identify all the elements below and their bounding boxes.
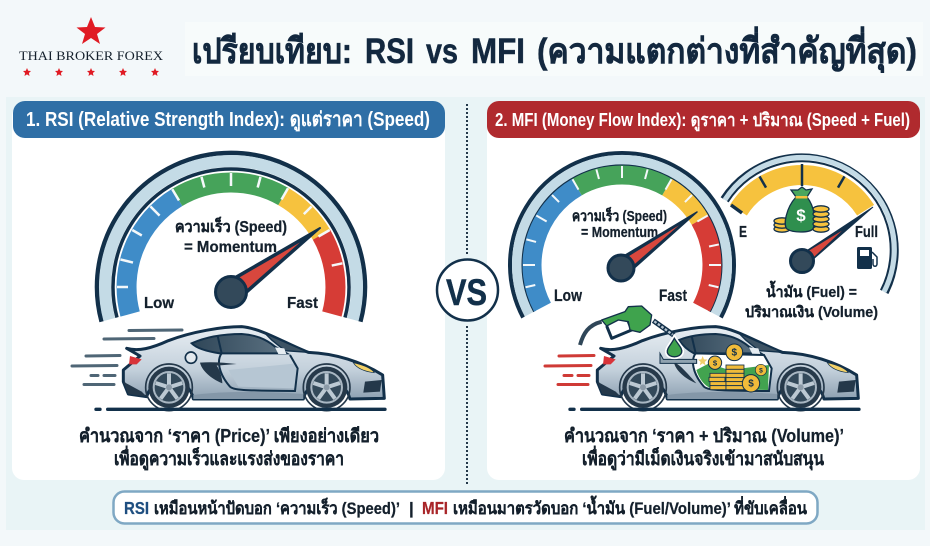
- logo wordmark: THAI BROKER FOREX: [19, 48, 164, 63]
- fuel caption: ปริมาณเงิน (Volume): [745, 303, 878, 321]
- bottom callout: RSI: [124, 498, 149, 518]
- money window in car door: $: [713, 358, 718, 367]
- gauge label: speed = momentum: [175, 215, 287, 256]
- speed lines: MFI car: [545, 356, 594, 384]
- caption: RSI: คำนวณจาก ‘ราคา (Price)’ เพียงอย่างเดียว: [79, 425, 379, 446]
- car: MFI: [570, 327, 859, 411]
- gauge label: Fast: Fast: [659, 287, 687, 305]
- panel: MFI: [487, 101, 920, 480]
- rear wheel: [146, 364, 192, 411]
- fuel caption: น้ำมัน (Fuel) =: [766, 280, 857, 301]
- fuel label: Full: Full: [855, 224, 878, 241]
- speed gauge: MFI: [510, 153, 734, 318]
- road line: [96, 404, 385, 414]
- title: [192, 26, 917, 73]
- VS badge: VS: [446, 272, 487, 313]
- title: vs: [426, 32, 458, 71]
- bottom callout: MFI: [422, 498, 448, 518]
- fuel caption: [745, 280, 878, 321]
- gauge needle: MFI: [608, 212, 697, 281]
- gauge needle: RSI: [216, 228, 320, 308]
- icon: large red star: [76, 17, 106, 44]
- speed lines: RSI car: [72, 330, 182, 384]
- fuel needle: [790, 207, 873, 272]
- icon: money bag and coins: [774, 187, 829, 232]
- car: RSI: [96, 327, 385, 411]
- title: MFI: [471, 32, 525, 71]
- bottom callout: [114, 492, 818, 524]
- bottom callout: เหมือนหน้าปัดบอก ‘ความเร็ว (Speed)’: [154, 496, 400, 518]
- fuel label: E: E: [739, 224, 747, 241]
- caption: MFI: [564, 425, 844, 471]
- gauge label: speed = momentum: = Momentum: [184, 239, 277, 256]
- panel heading: RSI: [13, 101, 445, 138]
- panel background: [12, 104, 445, 480]
- money window in car door: [693, 344, 772, 392]
- logo: Thai Broker Forex: [19, 17, 164, 76]
- bottom callout: |: [409, 499, 414, 518]
- gauge label: Fast: Fast: [287, 295, 319, 312]
- panel: RSI: [12, 101, 445, 480]
- gauge label: speed = momentum: = Momentum: [581, 225, 658, 241]
- speed gauge: RSI: [97, 153, 365, 322]
- caption: MFI: เพื่อดูว่ามีเม็ดเงินจริงเข้ามาสนับสนุน: [582, 445, 824, 471]
- panel background: [487, 104, 920, 480]
- gauge label: speed = momentum: [572, 206, 667, 241]
- money window in car door: $: [759, 367, 763, 374]
- gauge label: Low: Low: [144, 295, 175, 312]
- panel heading: MFI: [487, 101, 920, 138]
- money window in car door: $: [732, 348, 738, 359]
- road line: [570, 404, 859, 414]
- VS badge: [437, 260, 498, 320]
- front wheel: [303, 364, 350, 411]
- bottom callout: เหมือนมาตรวัดบอก ‘น้ำมัน (Fuel/Volume)’ ที่ขับเคลื่อน: [453, 495, 807, 518]
- caption: RSI: [79, 425, 379, 471]
- gauge label: speed = momentum: ความเร็ว (Speed): [175, 215, 287, 236]
- fuel gauge: [722, 155, 897, 293]
- gauge label: speed = momentum: ความเร็ว (Speed): [572, 206, 667, 225]
- caption: RSI: เพื่อดูความเร็วและแรงส่งของราคา: [114, 445, 344, 471]
- panel heading: RSI: 1. RSI (Relative Strength Index): ดูแต่ราคา (Speed): [26, 109, 430, 133]
- divider: [466, 104, 468, 484]
- gauge label: Low: Low: [554, 287, 582, 305]
- icon: fuel pump: [857, 247, 877, 269]
- title: เปรียบเทียบ:: [192, 32, 352, 71]
- caption: MFI: คำนวณจาก ‘ราคา + ปริมาณ (Volume)’: [564, 425, 844, 446]
- icon: money bag and coins: $: [796, 206, 806, 225]
- title: RSI: [365, 32, 414, 71]
- icon: row of small stars: [23, 68, 159, 76]
- front wheel: [777, 364, 824, 411]
- icon: fuel nozzle and drop: [580, 306, 697, 363]
- money window in car door: $: [748, 379, 754, 390]
- rear wheel: [620, 364, 666, 411]
